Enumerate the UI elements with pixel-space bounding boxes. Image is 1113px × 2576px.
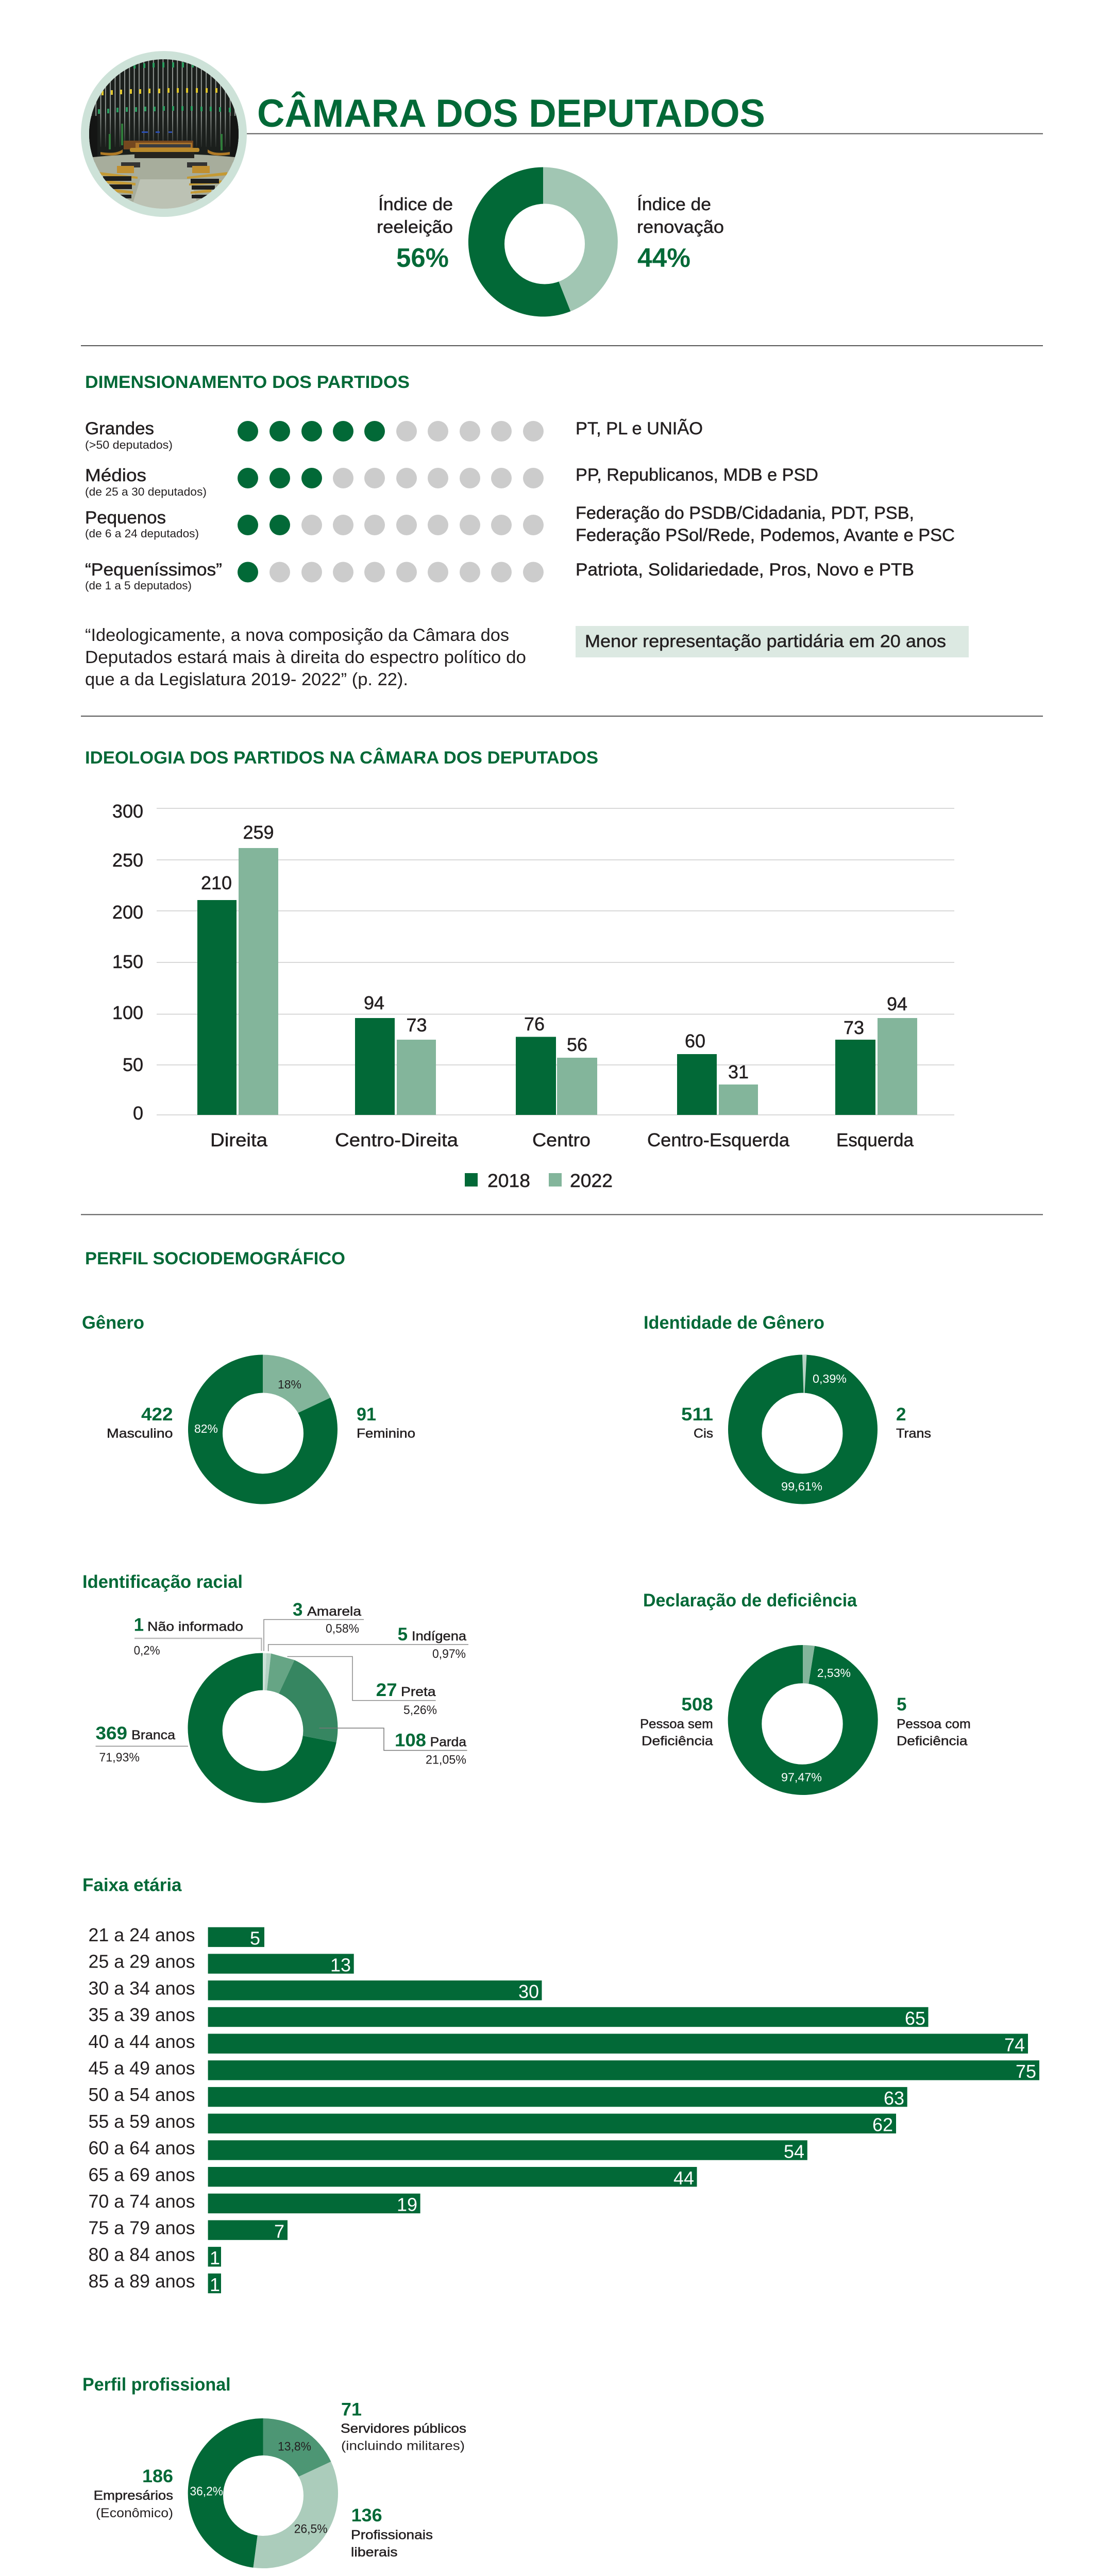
panel: identidade de gênero: Cis xyxy=(694,1426,713,1440)
bar value labels: 259 xyxy=(243,822,274,843)
y axis labels: 50 xyxy=(123,1054,143,1075)
panel: declaração de deficiência: Pessoa com xyxy=(897,1717,971,1731)
category labels xyxy=(210,1129,914,1150)
row: pequeníssimos: (de 1 a 5 deputados) xyxy=(85,579,192,592)
label: índice de reeleição 56%: Índice de xyxy=(378,195,453,214)
panel: gênero: Gênero xyxy=(82,1313,144,1333)
label: índice de renovação 44%: 44% xyxy=(637,243,690,273)
panel: gênero xyxy=(82,1313,415,1504)
donut: identidade de gênero xyxy=(728,1355,878,1504)
panel: identidade de gênero: 2 xyxy=(896,1404,906,1425)
callout: preta: 27 xyxy=(376,1680,397,1700)
callout: branca xyxy=(96,1723,175,1765)
panel: declaração de deficiência: Deficiência xyxy=(897,1734,968,1749)
callout: menor representação partidária xyxy=(576,626,969,657)
icon: circular photo of the Câmara plenary xyxy=(81,51,247,217)
panel: gênero: 82% xyxy=(194,1422,218,1435)
label: servidores públicos: Servidores públicos xyxy=(341,2421,466,2436)
y axis labels: 150 xyxy=(112,951,143,972)
callout lines xyxy=(96,1620,468,1751)
panel: declaração de deficiência: 2,53% xyxy=(817,1666,851,1680)
bar value labels: 56 xyxy=(567,1034,587,1055)
age labels: 70 a 74 anos xyxy=(89,2191,195,2212)
callout: parda: 108 xyxy=(395,1730,426,1750)
row: grandes: PT, PL e UNIÃO xyxy=(576,419,703,438)
bars 2022 xyxy=(239,848,917,1115)
label: índice de renovação 44%: renovação xyxy=(637,217,724,237)
legend: 2018 xyxy=(487,1170,530,1191)
callout: branca: 71,93% xyxy=(99,1751,140,1765)
callout: parda: Parda xyxy=(430,1735,466,1749)
age bar values: 44 xyxy=(673,2167,694,2189)
bar value labels: 94 xyxy=(887,993,907,1014)
category labels: Centro-Esquerda xyxy=(647,1129,790,1150)
category labels: Esquerda xyxy=(836,1129,914,1150)
heading: perfil sociodemográfico: PERFIL SOCIODEMOGRÁFICO xyxy=(85,1249,345,1268)
callout: não informado: 0,2% xyxy=(134,1643,160,1658)
callout: amarela: 3 xyxy=(293,1600,302,1620)
age bar values: 19 xyxy=(397,2194,417,2215)
bar value labels: 94 xyxy=(364,992,384,1013)
age labels: 75 a 79 anos xyxy=(89,2217,195,2239)
callout: não informado: Não informado xyxy=(147,1620,243,1634)
age labels xyxy=(89,1924,195,2292)
callout: indígena: 5 xyxy=(398,1624,408,1645)
row: pequenos: Pequenos xyxy=(85,508,166,528)
donut: declaração de deficiência xyxy=(728,1645,878,1795)
panel: perfil profissional: 13,8% xyxy=(278,2440,311,2453)
age labels: 21 a 24 anos xyxy=(89,1924,195,1945)
panel: declaração de deficiência: 97,47% xyxy=(781,1770,822,1784)
panel: gênero: 422 xyxy=(141,1404,173,1425)
panel: declaração de deficiência: Pessoa sem xyxy=(640,1717,713,1731)
panel: declaração de deficiência: Declaração de deficiência xyxy=(643,1590,857,1611)
label: profissionais liberais: liberais xyxy=(351,2545,398,2560)
panel: declaração de deficiência: 508 xyxy=(681,1694,713,1715)
age labels: 80 a 84 anos xyxy=(89,2244,195,2265)
heading: faixa etária: Faixa etária xyxy=(82,1875,182,1895)
age bar values: 5 xyxy=(250,1928,260,1949)
age labels: 30 a 34 anos xyxy=(89,1977,195,1998)
bar value labels: 76 xyxy=(524,1013,545,1035)
quote: “Ideologicamente, a nova composição da Câmara dos xyxy=(85,625,509,645)
callout: não informado: 1 xyxy=(134,1615,144,1635)
age bar values: 75 xyxy=(1016,2061,1036,2082)
row: médios xyxy=(85,465,818,498)
callout: branca: 369 xyxy=(96,1723,127,1743)
age labels: 35 a 39 anos xyxy=(89,2004,195,2025)
panel: identidade de gênero: 511 xyxy=(681,1404,713,1425)
panel: declaração de deficiência xyxy=(640,1590,971,1795)
label: índice de reeleição 56%: reeleição xyxy=(377,217,453,237)
age bar values: 13 xyxy=(330,1954,351,1975)
callout: indígena: 0,97% xyxy=(432,1647,466,1661)
callout: parda: 21,05% xyxy=(426,1753,466,1767)
row: grandes: (>50 deputados) xyxy=(85,438,173,451)
title: CÂMARA DOS DEPUTADOS xyxy=(257,91,765,135)
age labels: 55 a 59 anos xyxy=(89,2111,195,2132)
panel: perfil profissional xyxy=(82,2375,466,2568)
label: servidores públicos: 71 xyxy=(341,2400,362,2420)
age bar values xyxy=(210,1928,1036,2295)
callout: parda xyxy=(395,1730,466,1767)
y axis labels: 0 xyxy=(133,1103,143,1124)
row: médios: PP, Republicanos, MDB e PSD xyxy=(576,465,818,485)
bar value labels: 210 xyxy=(201,872,232,893)
quote xyxy=(85,625,526,689)
age labels: 45 a 49 anos xyxy=(89,2058,195,2078)
age labels: 85 a 89 anos xyxy=(89,2270,195,2292)
category labels: Centro xyxy=(532,1129,591,1150)
row: grandes: Grandes xyxy=(85,419,154,438)
panel: gênero: Feminino xyxy=(357,1426,415,1440)
donut: identificação racial xyxy=(188,1653,338,1803)
row: médios: (de 25 a 30 deputados) xyxy=(85,485,207,498)
panel: gênero: 91 xyxy=(357,1404,376,1425)
bar value labels: 73 xyxy=(844,1017,864,1038)
row: pequenos: Federação do PSDB/Cidadania, PDT, PSB, xyxy=(576,503,914,523)
callout: preta: 5,26% xyxy=(403,1703,437,1717)
y axis labels: 100 xyxy=(112,1002,143,1023)
label: servidores públicos xyxy=(341,2400,466,2453)
callout: amarela xyxy=(293,1600,361,1636)
callout: preta xyxy=(376,1680,437,1717)
label: profissionais liberais: 136 xyxy=(351,2505,382,2526)
label: empresários: 186 xyxy=(142,2466,173,2486)
callout: menor representação partidária: Menor representação partidária em 20 anos xyxy=(585,632,946,651)
legend: 2022 xyxy=(570,1170,613,1191)
callout: amarela: Amarela xyxy=(307,1604,361,1619)
label: índice de renovação 44%: Índice de xyxy=(637,195,711,214)
age labels: 40 a 44 anos xyxy=(89,2031,195,2052)
age bars xyxy=(208,1927,1039,2293)
donut: perfil profissional xyxy=(188,2418,338,2568)
age bar values: 63 xyxy=(884,2088,904,2109)
age bar values: 74 xyxy=(1004,2034,1025,2056)
row: pequeníssimos: “Pequeníssimos” xyxy=(85,560,222,580)
callout: preta: Preta xyxy=(401,1685,436,1699)
panel: perfil profissional: 36,2% xyxy=(190,2485,223,2499)
bars 2018 xyxy=(197,900,875,1115)
y axis labels xyxy=(112,801,143,1124)
panel: declaração de deficiência: 5 xyxy=(897,1694,906,1715)
callout: branca: Branca xyxy=(131,1728,175,1742)
panel: perfil profissional: Perfil profissional xyxy=(82,2375,231,2395)
panel: identidade de gênero xyxy=(644,1313,931,1504)
row: pequenos xyxy=(85,503,955,545)
panel: identidade de gênero: Trans xyxy=(896,1426,931,1440)
label: empresários: (Econômico) xyxy=(96,2506,173,2520)
age labels: 25 a 29 anos xyxy=(89,1951,195,1972)
category labels: Direita xyxy=(210,1129,268,1150)
row: pequeníssimos: Patriota, Solidariedade, Pros, Novo e PTB xyxy=(576,560,914,580)
donut: gênero xyxy=(188,1355,338,1504)
row: pequenos: Federação PSol/Rede, Podemos, Avante e PSC xyxy=(576,526,955,545)
bar value labels: 73 xyxy=(406,1014,427,1036)
panel: perfil profissional: 26,5% xyxy=(294,2522,328,2536)
panel: identificação racial xyxy=(82,1572,468,1803)
label: profissionais liberais xyxy=(351,2505,433,2560)
age bar values: 7 xyxy=(274,2221,284,2242)
panel: identidade de gênero: Identidade de Gênero xyxy=(644,1313,824,1333)
panel: identidade de gênero: 0,39% xyxy=(813,1372,847,1385)
callout: não informado xyxy=(134,1615,243,1658)
quote: Deputados estará mais à direita do espectro político do xyxy=(85,648,526,667)
panel: identidade de gênero: 99,61% xyxy=(781,1480,822,1493)
callout: indígena xyxy=(398,1624,466,1661)
callout: indígena: Indígena xyxy=(412,1629,466,1643)
age labels: 65 a 69 anos xyxy=(89,2164,195,2185)
age bar values: 54 xyxy=(784,2141,804,2162)
bar chart: ideologia xyxy=(112,801,954,1191)
label: índice de reeleição 56%: 56% xyxy=(396,243,449,273)
panel: declaração de deficiência: Deficiência xyxy=(642,1734,713,1749)
age bar values: 1 xyxy=(210,2247,220,2268)
label: empresários xyxy=(94,2466,173,2520)
y axis labels: 300 xyxy=(112,801,143,822)
quote: que a da Legislatura 2019- 2022” (p. 22). xyxy=(85,670,408,689)
label: índice de renovação 44% xyxy=(637,195,724,273)
row: pequeníssimos xyxy=(85,560,914,592)
bar chart: faixa etária xyxy=(89,1924,1039,2295)
heading: ideologia dos partidos: IDEOLOGIA DOS PARTIDOS NA CÂMARA DOS DEPUTADOS xyxy=(85,748,598,768)
label: servidores públicos: (incluindo militares) xyxy=(341,2439,465,2453)
label: profissionais liberais: Profissionais xyxy=(351,2528,433,2543)
bar value labels: 60 xyxy=(685,1030,705,1052)
donut chart: reelection vs renewal xyxy=(468,167,618,316)
legend xyxy=(465,1170,613,1191)
category labels: Centro-Direita xyxy=(335,1129,459,1150)
bar value labels xyxy=(201,822,907,1082)
panel: identificação racial: Identificação racial xyxy=(82,1572,243,1592)
age labels: 60 a 64 anos xyxy=(89,2138,195,2159)
age bar values: 1 xyxy=(210,2274,220,2295)
label: índice de reeleição 56% xyxy=(377,195,453,273)
heading: dimensionamento dos partidos: DIMENSIONAMENTO DOS PARTIDOS xyxy=(85,372,410,392)
row: médios: Médios xyxy=(85,466,146,485)
label: empresários: Empresários xyxy=(94,2488,173,2503)
row: pequenos: (de 6 a 24 deputados) xyxy=(85,527,199,540)
age bar values: 65 xyxy=(905,2008,925,2029)
bar value labels: 31 xyxy=(728,1061,749,1082)
row: grandes xyxy=(85,419,703,451)
y axis labels: 200 xyxy=(112,902,143,923)
age labels: 50 a 54 anos xyxy=(89,2084,195,2105)
age bar values: 62 xyxy=(872,2114,893,2136)
panel: gênero: 18% xyxy=(278,1378,301,1391)
y axis labels: 250 xyxy=(112,850,143,871)
panel: gênero: Masculino xyxy=(107,1426,173,1440)
age bar values: 30 xyxy=(518,1981,539,2002)
callout: amarela: 0,58% xyxy=(326,1622,359,1636)
